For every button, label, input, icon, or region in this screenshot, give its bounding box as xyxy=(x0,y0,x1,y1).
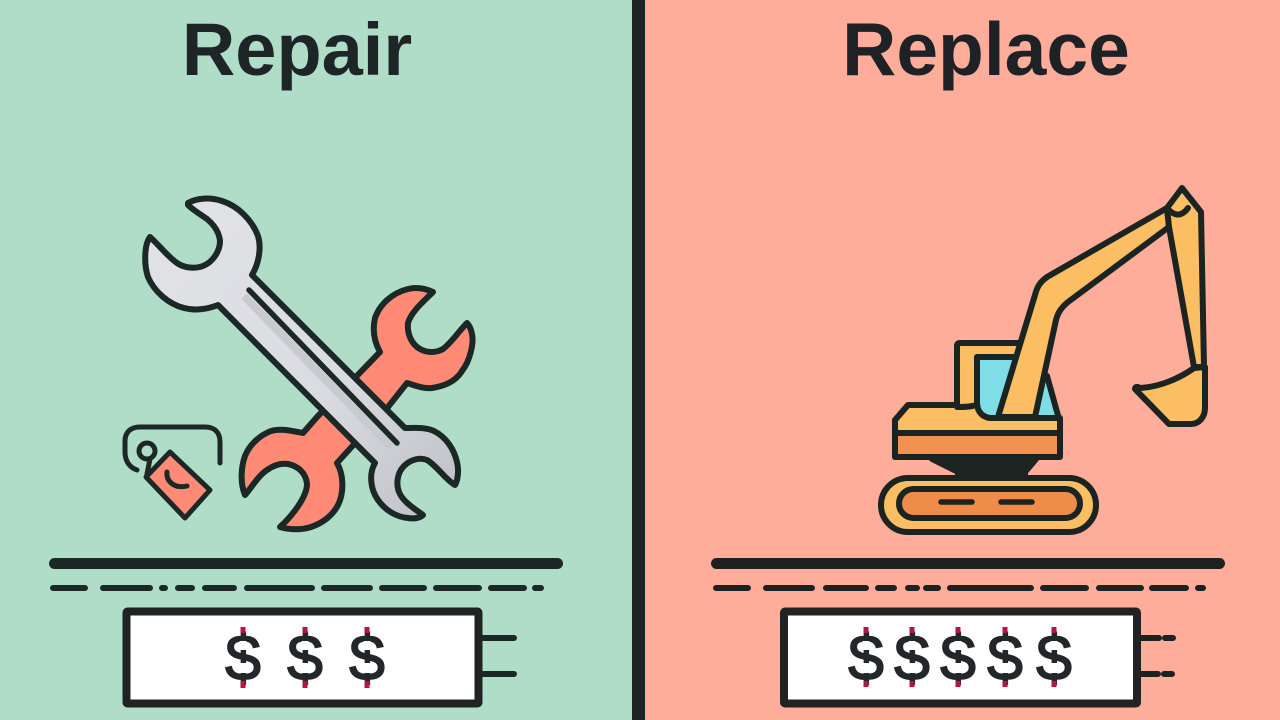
price: five dollars: $ xyxy=(894,622,930,694)
tag eyelet xyxy=(139,443,155,459)
price: five dollars: $ xyxy=(940,622,976,694)
excavator bucket xyxy=(1135,367,1205,424)
divider line: replace xyxy=(711,558,1225,569)
center divider xyxy=(632,0,645,720)
icon: silver wrench xyxy=(145,199,458,518)
heading: Replace: Replace xyxy=(842,7,1130,91)
dashed line: repair xyxy=(53,585,541,591)
excavator body xyxy=(895,403,1060,433)
cost box: replace xyxy=(784,612,1173,704)
red ticks on dollar signs xyxy=(866,627,1054,687)
dashed line: replace xyxy=(716,585,1203,591)
price: five dollars: $ xyxy=(987,622,1023,694)
icon: crossed wrenches xyxy=(145,199,473,529)
panel background: repair xyxy=(0,0,633,720)
price: five dollars: $ xyxy=(848,622,884,694)
icon: excavator xyxy=(881,188,1205,532)
panel: replace xyxy=(645,0,1280,720)
masks softening the bar inside each dollar sign xyxy=(243,641,367,673)
price: three dollars: $ xyxy=(349,622,385,694)
masks softening the bar inside each dollar sign xyxy=(866,641,1054,673)
excavator pedestal xyxy=(932,459,1036,476)
heading: Repair: Repair xyxy=(182,8,412,91)
price: three dollars: $ xyxy=(287,622,323,694)
excavator track xyxy=(881,478,1096,532)
excavator boom xyxy=(998,208,1169,417)
icon: red wrench xyxy=(242,288,473,529)
panel: repair xyxy=(0,0,633,720)
price: five dollars: $ xyxy=(1036,622,1072,694)
excavator body stripe xyxy=(895,433,1060,457)
tag body xyxy=(146,452,210,518)
price: three dollars: $ xyxy=(225,622,261,694)
icon: wrench handle groove xyxy=(249,290,397,443)
box frame xyxy=(784,612,1137,704)
track slots xyxy=(941,499,1032,505)
excavator stick xyxy=(1167,188,1204,367)
excavator joint xyxy=(1167,208,1188,215)
excavator cab xyxy=(957,343,1020,420)
box plugs xyxy=(1141,638,1173,674)
tag mark xyxy=(167,472,187,487)
icon: price tag xyxy=(125,427,220,518)
panel background: replace xyxy=(645,0,1280,720)
wrench handle shading xyxy=(244,296,391,447)
tag string xyxy=(147,459,150,474)
box frame xyxy=(126,612,478,704)
excavator cab window xyxy=(977,357,1059,419)
box plugs xyxy=(482,638,514,674)
tag loop cord xyxy=(125,427,220,470)
excavator track inner xyxy=(899,489,1080,518)
red ticks on dollar signs xyxy=(243,627,367,688)
cost box: repair xyxy=(126,612,514,704)
divider line: repair xyxy=(49,558,563,569)
